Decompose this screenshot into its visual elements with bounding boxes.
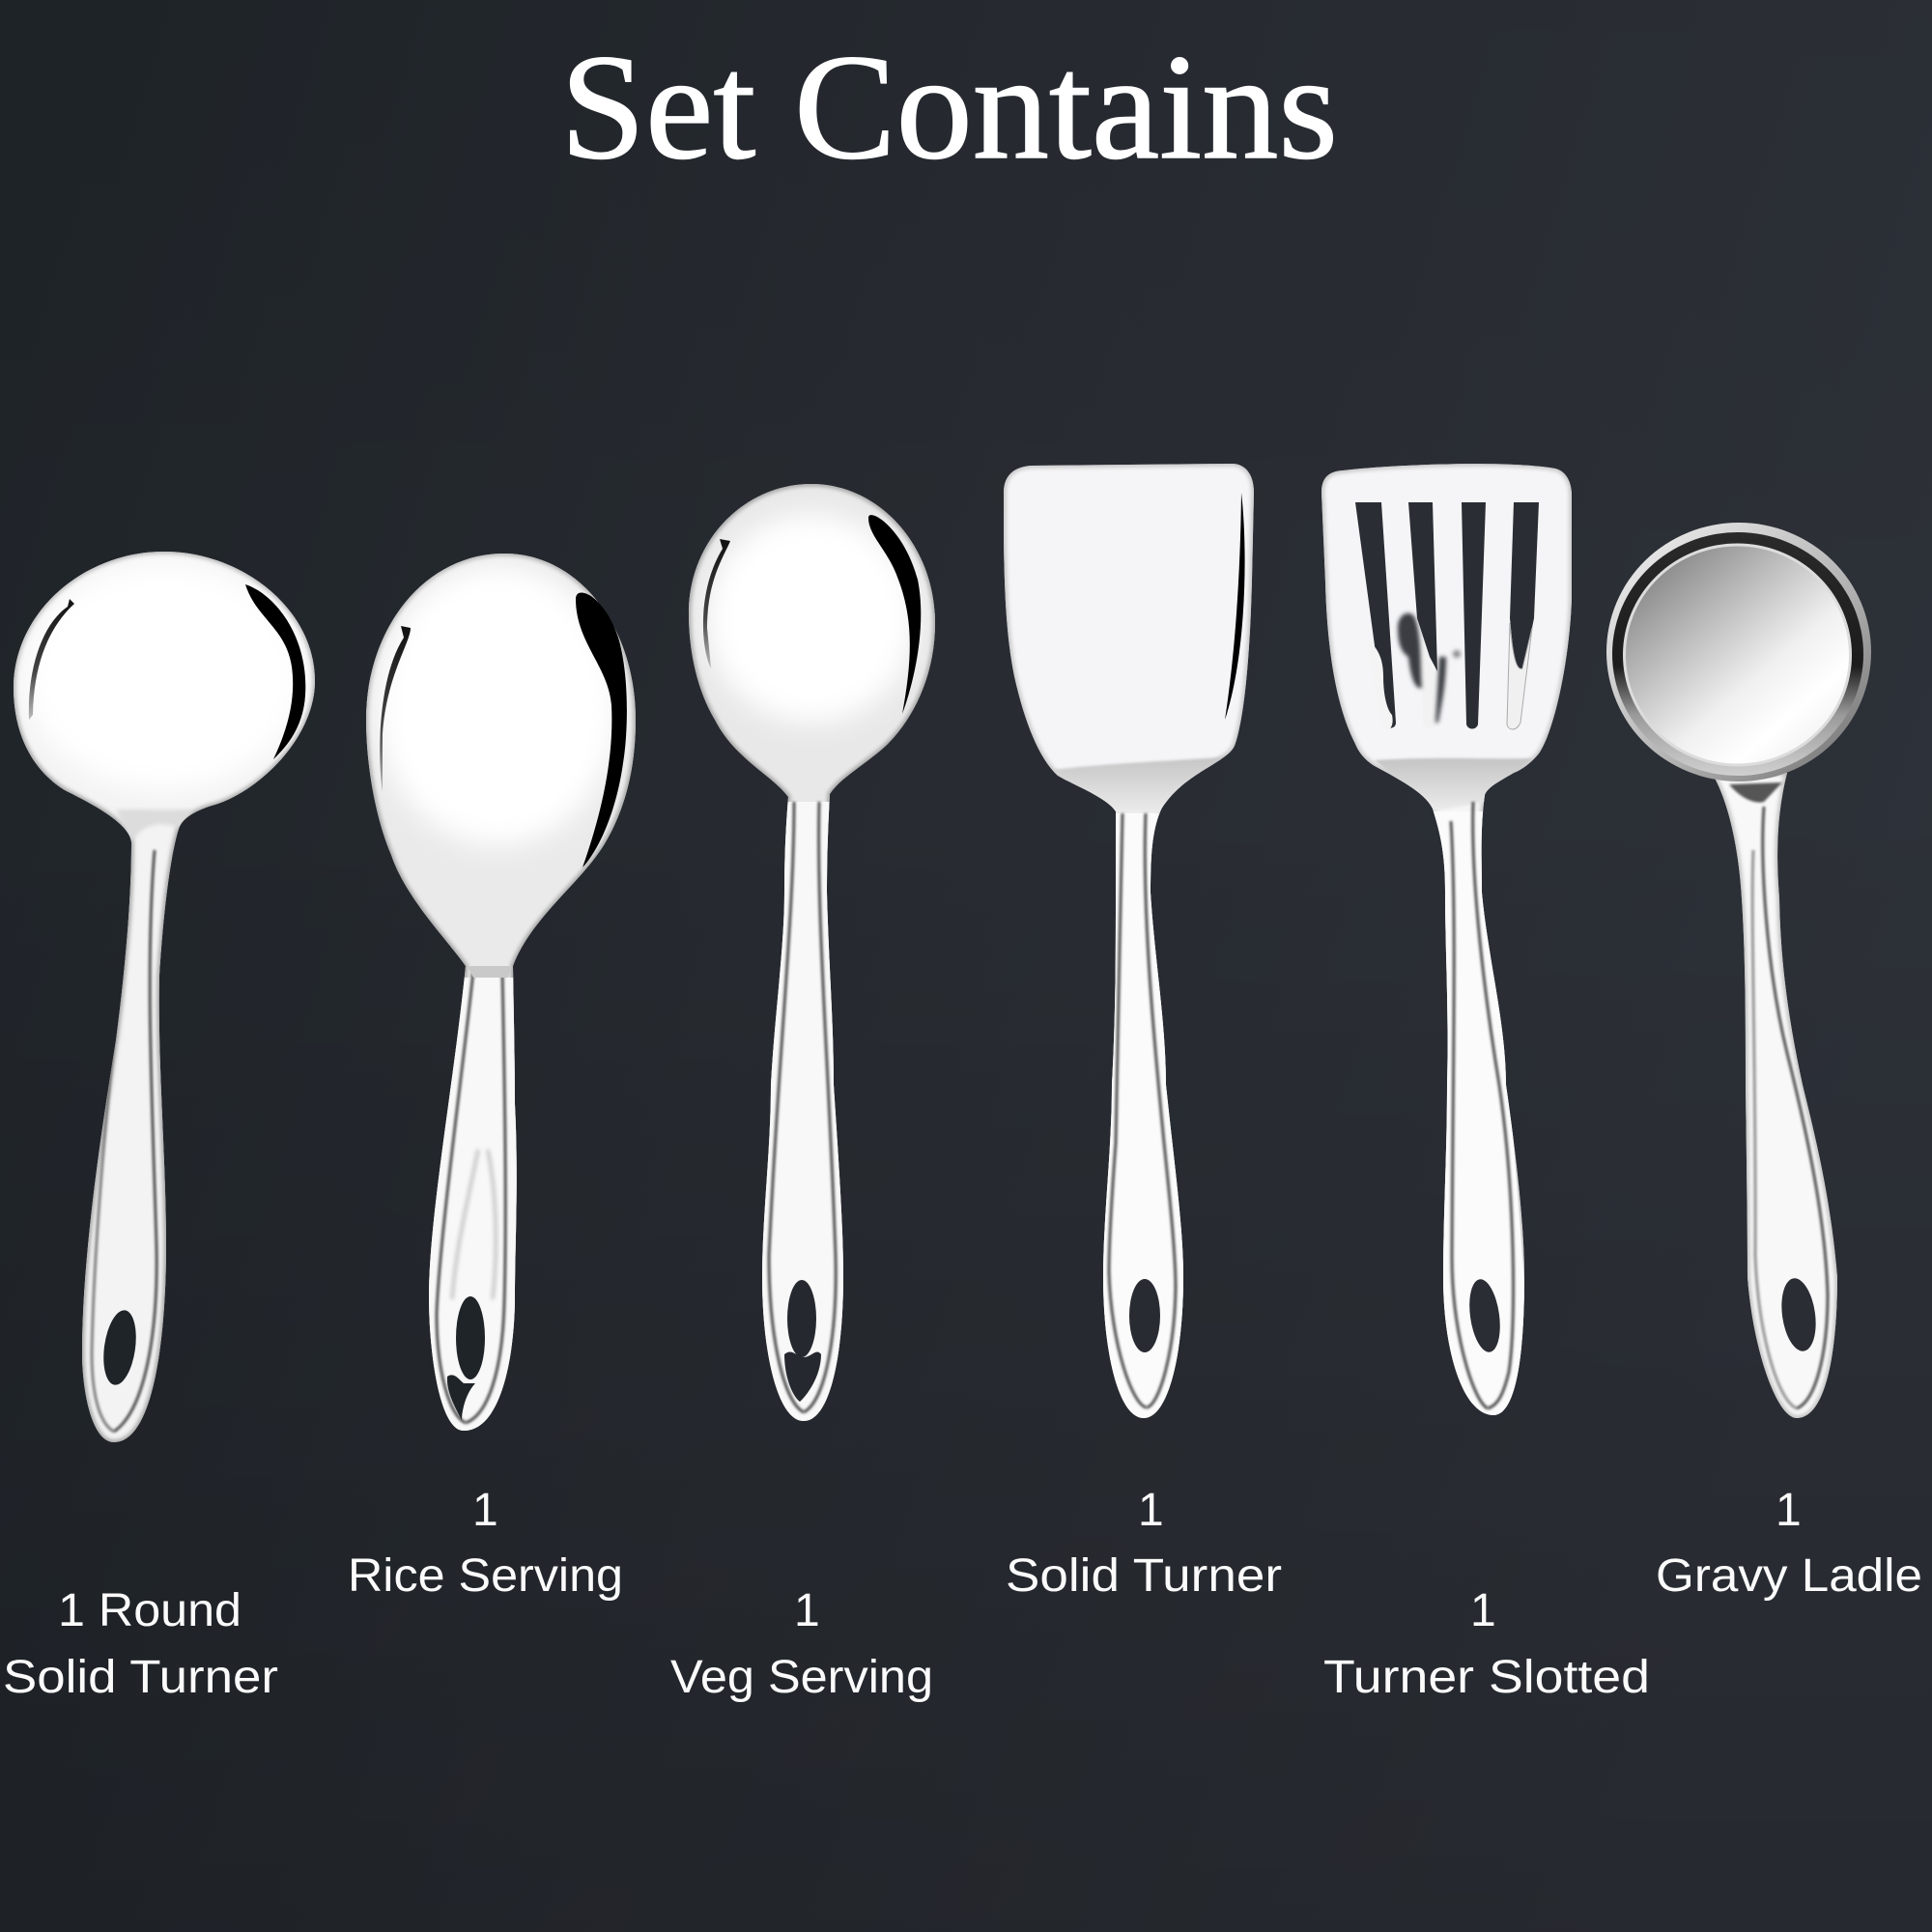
spoon body <box>689 484 935 1421</box>
reflection right <box>868 515 921 714</box>
label: rice serving: 1 <box>472 1485 498 1536</box>
smudges on blade <box>1398 613 1461 723</box>
slot 2 <box>1408 502 1437 728</box>
utensil: rice serving spoon <box>366 554 636 1439</box>
label: solid turner: Solid Turner <box>1006 1550 1282 1602</box>
slots <box>1355 502 1539 729</box>
reflection left <box>380 626 411 792</box>
hanging hole <box>784 1280 821 1402</box>
surface shading <box>1004 464 1254 1430</box>
label: veg serving <box>670 1585 933 1703</box>
hanging hole <box>1777 1276 1820 1353</box>
reflection right <box>1225 493 1245 720</box>
reflection left <box>29 599 74 720</box>
turner body <box>1004 464 1254 1418</box>
label: veg serving: Veg Serving <box>670 1652 933 1703</box>
surface shading <box>14 552 315 1442</box>
label: round solid turner: Solid Turner <box>3 1652 278 1703</box>
utensil: gravy ladle <box>1606 523 1871 1418</box>
utensil: veg serving spoon <box>689 484 935 1430</box>
label: turner slotted: Turner Slotted <box>1323 1652 1650 1703</box>
label: gravy ladle: Gravy Ladle <box>1656 1550 1922 1602</box>
hanging hole <box>1465 1277 1504 1354</box>
label: rice serving <box>348 1485 623 1602</box>
ladle handle <box>1712 773 1837 1418</box>
label: round solid turner <box>3 1585 278 1703</box>
label: gravy ladle <box>1656 1485 1922 1602</box>
label: round solid turner: 1 Round <box>58 1585 242 1636</box>
label: rice serving: Rice Serving <box>348 1550 623 1602</box>
hanging hole <box>99 1308 140 1387</box>
label: solid turner <box>1006 1485 1282 1602</box>
hanging hole <box>1129 1279 1160 1352</box>
slot 3 <box>1462 502 1486 728</box>
title: Set Contains <box>560 23 1338 190</box>
reflection left <box>703 539 730 668</box>
label: solid turner: 1 <box>1138 1485 1164 1536</box>
spoon body <box>14 552 315 1442</box>
hanging hole <box>447 1296 485 1420</box>
bowl rim <box>1606 523 1871 781</box>
utensil: slotted turner <box>1321 464 1572 1430</box>
label: turner slotted <box>1323 1585 1650 1703</box>
spoon body <box>366 554 636 1431</box>
surface shading <box>689 484 935 1430</box>
label: veg serving: 1 <box>794 1585 820 1636</box>
bowl interior <box>1625 545 1851 765</box>
label: turner slotted: 1 <box>1470 1585 1496 1636</box>
slot 1 <box>1355 502 1396 729</box>
surface shading <box>366 554 636 1439</box>
label: gravy ladle: 1 <box>1776 1485 1802 1536</box>
reflection right <box>576 592 627 867</box>
utensil: solid turner <box>1004 464 1254 1430</box>
slot 4 <box>1507 502 1539 729</box>
surface shading <box>1321 464 1572 1430</box>
bowl dark band <box>1612 532 1863 776</box>
turner body <box>1321 464 1572 1415</box>
handle shading <box>1712 773 1837 1418</box>
utensil: round solid turner <box>14 552 315 1442</box>
reflection right <box>245 584 305 759</box>
